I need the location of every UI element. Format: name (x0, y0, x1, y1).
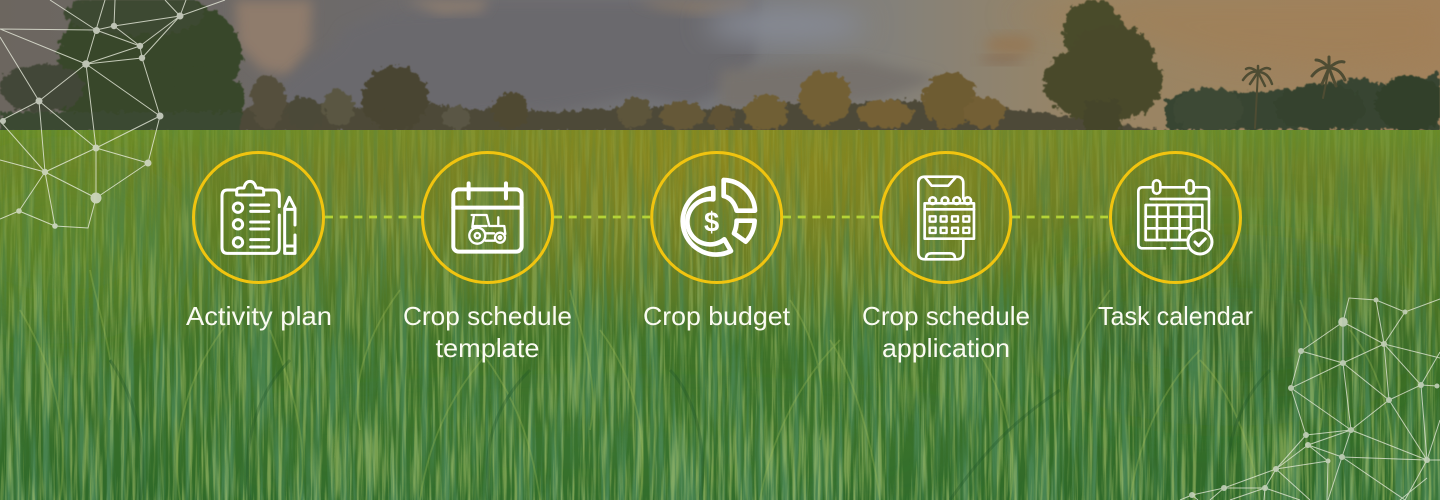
label (403, 301, 572, 363)
icon: checklist clipboard and pencil (222, 181, 295, 253)
icon: dollar pie chart (683, 180, 755, 255)
icon: calendar with check mark (1138, 180, 1212, 254)
dashed connectors between steps (325, 216, 1108, 218)
ring (881, 152, 1011, 282)
ring (194, 152, 324, 282)
network decoration: bottom right (1180, 298, 1440, 500)
broad tone variation (0, 160, 1420, 500)
ring (652, 152, 782, 282)
label: Crop schedule (403, 301, 572, 331)
label: Crop budget (643, 301, 791, 331)
ring (1110, 152, 1240, 282)
step: Crop schedule application (862, 152, 1030, 363)
label: Task calendar (1098, 301, 1253, 331)
label: Activity plan (186, 301, 332, 331)
label: application (882, 333, 1010, 363)
label: template (436, 333, 540, 363)
icon: calendar with tractor (453, 183, 522, 252)
background: sunset sky (0, 0, 1440, 135)
clouds (235, 0, 1440, 125)
grass blades (20, 270, 1393, 500)
left trees (58, 0, 242, 117)
label: Crop schedule (862, 301, 1030, 331)
label (862, 301, 1030, 363)
grass streak texture (0, 130, 1440, 500)
icon: dollar pie chart: $ (704, 206, 719, 237)
right tall tree (1043, 42, 1163, 122)
step: Crop budget (643, 152, 791, 331)
palm trees (1243, 57, 1345, 128)
icon: phone with calendar (918, 177, 974, 259)
ring (422, 152, 552, 282)
background: rice field (0, 130, 1440, 500)
tree line (0, 0, 1440, 134)
step: Activity plan (186, 152, 332, 331)
network decoration: top left (0, 0, 225, 229)
step: Task calendar (1098, 152, 1253, 331)
step: Crop schedule template (403, 152, 572, 363)
